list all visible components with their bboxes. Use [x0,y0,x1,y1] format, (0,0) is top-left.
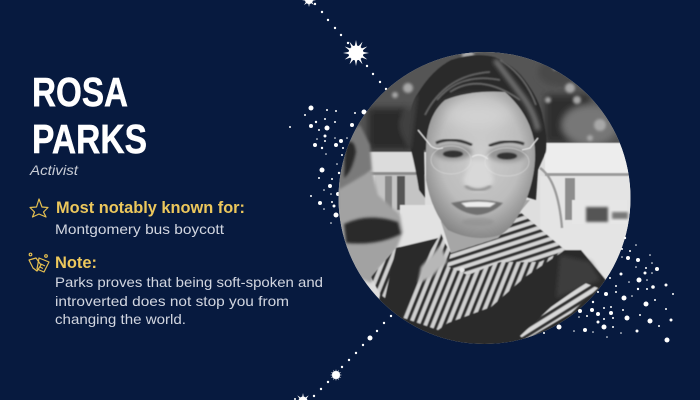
heading: most notably known for: Most notably known for: [56,198,245,217]
eyes [443,150,463,158]
title: PARKS [32,116,147,162]
text: note paragraph: changing the world. [55,311,186,327]
mouth [451,200,503,215]
sweater highlight [556,256,598,296]
title [32,69,147,162]
title: ROSA [32,69,128,115]
glasses [418,130,538,176]
constellation: lower line [294,315,392,400]
left stripes [371,248,396,298]
hair [409,55,547,200]
constellation: upper line [302,0,387,90]
parked car: left [370,151,416,172]
text: known for detail: Montgomery bus boycott [55,221,224,237]
parked car: right [545,143,633,174]
dark base under clothes [378,238,606,344]
collar stripes [402,226,565,331]
text: note paragraph: introverted does not stop you from [55,293,289,309]
brows [436,140,472,145]
star cluster: right of portrait [543,237,674,342]
face [426,92,535,238]
foliage backdrop [356,52,620,153]
portrait: Rosa Parks photo [338,49,640,350]
neck [440,200,530,253]
star cluster: left of portrait [289,106,366,224]
text: note paragraph [55,274,323,327]
subtitle: occupation: Activist [29,162,79,178]
chin shadow [464,218,492,224]
nose [463,160,494,190]
right sleeve stripes [520,283,598,340]
icon: pinned notes [29,253,49,272]
forehead highlight [444,101,512,129]
icon: star [30,199,48,217]
text: note paragraph: Parks proves that being soft-spoken and [55,274,323,290]
eye sockets [434,144,472,160]
heading: note: Note: [55,253,97,272]
background person [338,125,372,215]
